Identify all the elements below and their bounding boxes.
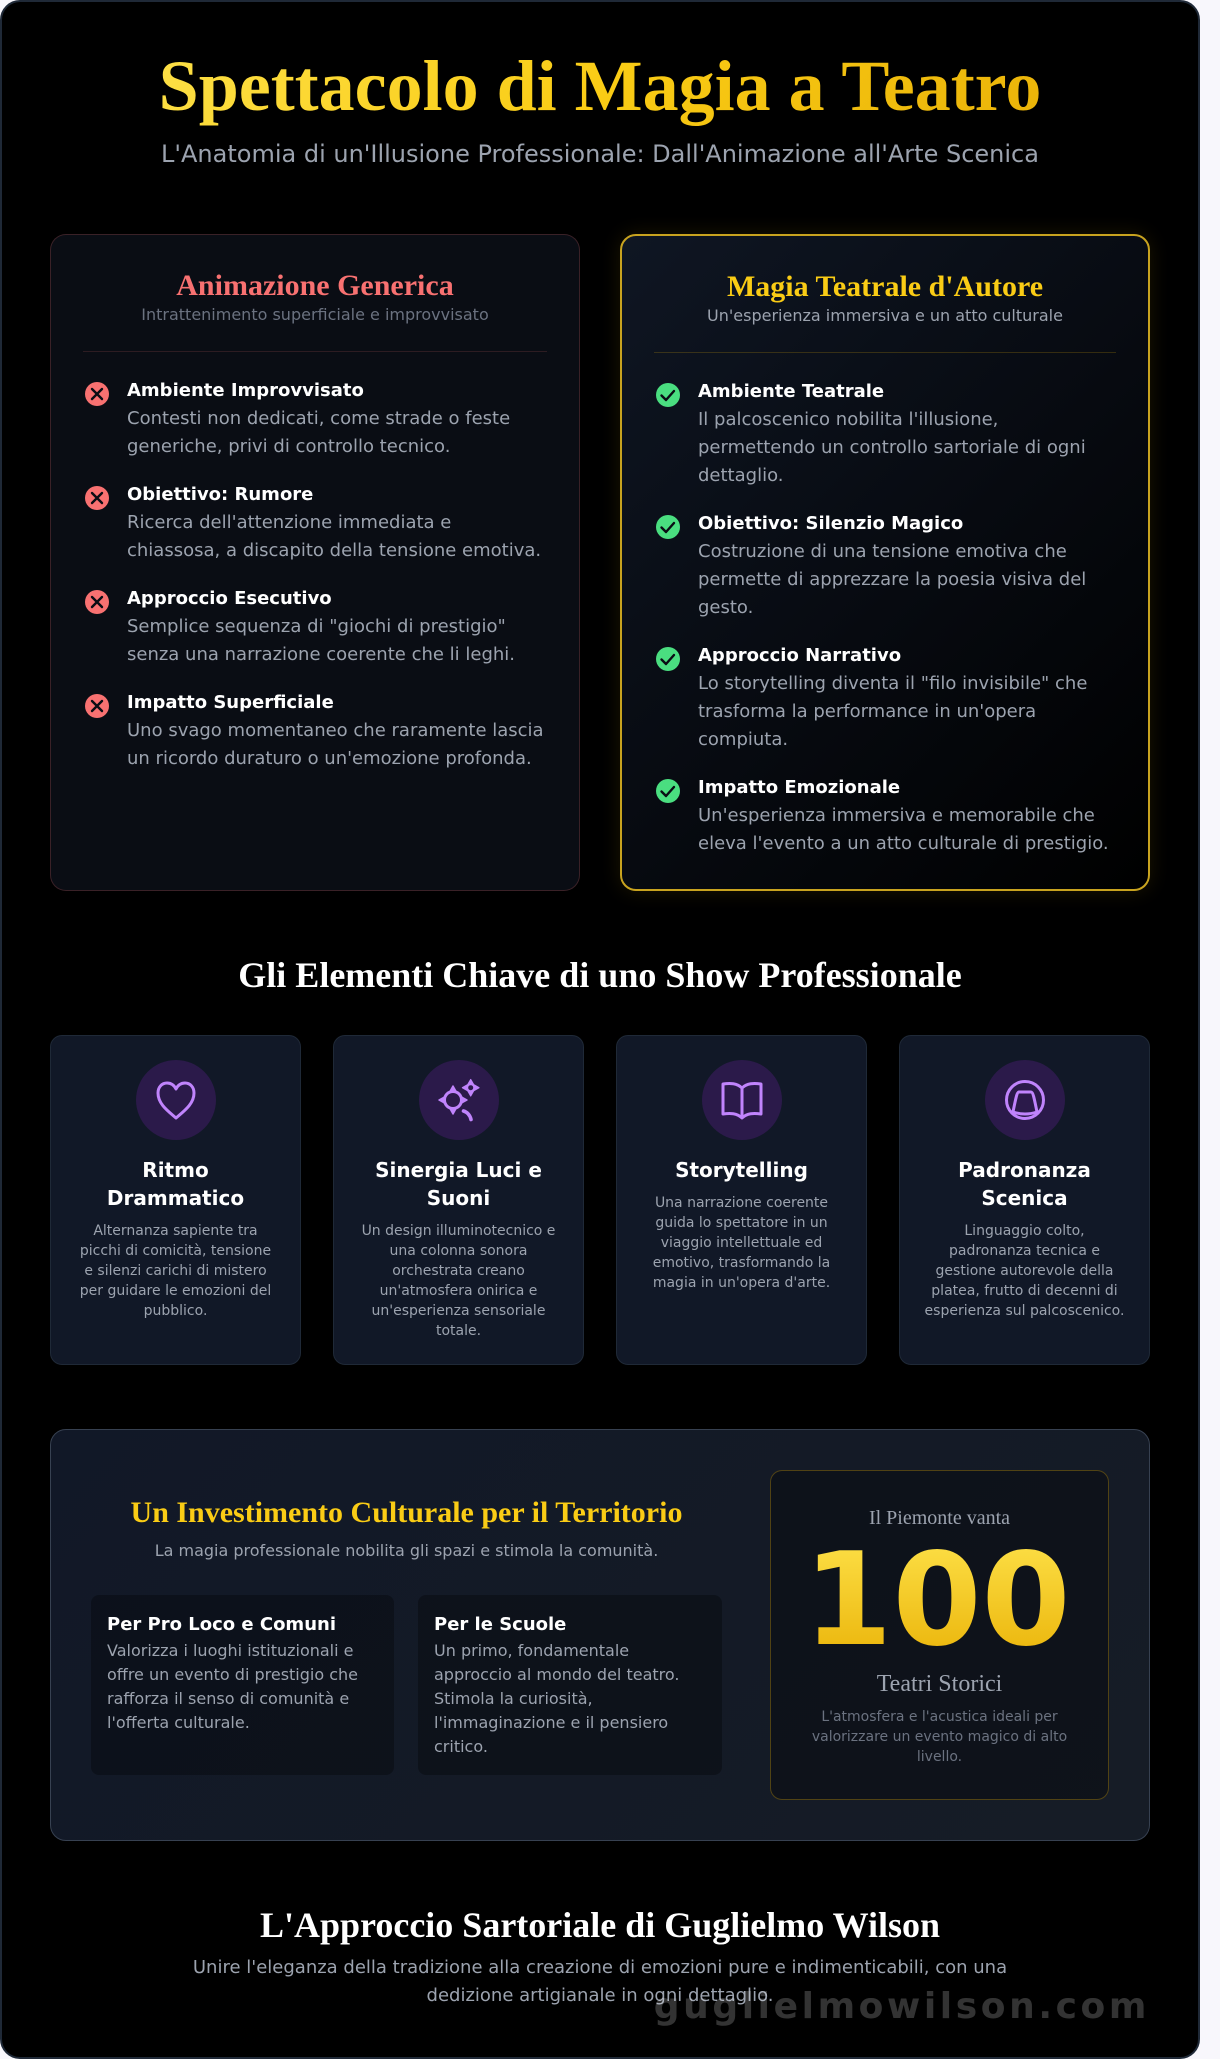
card title: Sinergia Luci e — [375, 1158, 542, 1182]
footer text — [193, 1957, 1007, 2006]
card text: rafforza il senso di comunità e — [107, 1689, 349, 1708]
stat description: L'atmosfera e l'acustica ideali per — [821, 1709, 1058, 1725]
card text: orchestrata creano — [392, 1263, 525, 1279]
card title: Padronanza — [958, 1158, 1091, 1182]
card text: Un primo, fondamentale — [434, 1641, 629, 1660]
card text: l'immaginazione e il pensiero — [434, 1713, 668, 1732]
section heading: Gli Elementi Chiave di uno Show Professionale — [238, 955, 962, 995]
subheading: Un'esperienza immersiva e un atto culturale — [707, 306, 1063, 325]
item: obiettivo silenzio magico: gesto. — [698, 597, 753, 618]
card title — [375, 1158, 542, 1210]
panel: animazione generica — [50, 234, 580, 891]
subtitle: L'Anatomia di un'Illusione Professionale: Dall'Animazione all'Arte Scenica — [161, 140, 1039, 168]
card text: Valorizza i luoghi istituzionali e — [107, 1641, 354, 1660]
stat description — [812, 1709, 1067, 1765]
icon: open book — [702, 1060, 782, 1140]
footer heading: L'Approccio Sartoriale di Guglielmo Wilson — [260, 1905, 940, 1945]
stat intro: Il Piemonte vanta — [869, 1507, 1010, 1529]
card text — [653, 1195, 830, 1291]
item: approccio narrativo: Approccio Narrativo — [698, 645, 901, 666]
item: impatto superficiale — [85, 692, 544, 769]
item: ambiente teatrale: Il palcoscenico nobilita l'illusione, — [698, 409, 998, 430]
title: Spettacolo di Magia a Teatro — [159, 46, 1041, 126]
card title: Storytelling — [675, 1158, 808, 1182]
item: approccio narrativo: trasforma la performance in un'opera — [698, 701, 1036, 722]
item: impatto emozionale — [656, 777, 1109, 854]
card: storytelling — [616, 1035, 867, 1365]
item: impatto superficiale: Impatto Superficiale — [127, 692, 334, 713]
card text: emotivo, trasformando la — [653, 1255, 830, 1271]
card title: Per Pro Loco e Comuni — [107, 1614, 336, 1635]
item: obiettivo silenzio magico: permette di apprezzare la poesia visiva del — [698, 569, 1086, 590]
card text: magia in un'opera d'arte. — [653, 1275, 830, 1291]
card text: esperienza sul palcoscenico. — [925, 1303, 1124, 1319]
watermark: guglielmowilson.com — [654, 1986, 1150, 2027]
stat label: Teatri Storici — [877, 1671, 1002, 1697]
item: ambiente teatrale: dettaglio. — [698, 465, 784, 486]
card: sinergia luci e suoni — [333, 1035, 584, 1365]
card text: picchi di comicità, tensione — [80, 1243, 271, 1259]
subheading: Intrattenimento superficiale e improvvisato — [141, 305, 489, 324]
card text: Una narrazione coerente — [655, 1195, 828, 1211]
card text: un'esperienza sensoriale — [372, 1303, 545, 1319]
item: impatto superficiale: Uno svago momentaneo che raramente lascia — [127, 720, 544, 741]
card text: Un design illuminotecnico e — [362, 1223, 555, 1239]
icon: masque — [985, 1060, 1065, 1140]
item: obiettivo rumore: Ricerca dell'attenzione immediata e — [127, 512, 451, 533]
card text: una colonna sonora — [390, 1243, 527, 1259]
card text: Alternanza sapiente tra — [93, 1223, 258, 1239]
item: ambiente teatrale: Ambiente Teatrale — [698, 381, 884, 402]
stat description: valorizzare un evento magico di alto — [812, 1729, 1067, 1745]
card text: platea, frutto di decenni di — [931, 1283, 1118, 1299]
card text: e silenzi carichi di mistero — [84, 1263, 267, 1279]
item: approccio esecutivo: senza una narrazione coerente che li leghi. — [127, 644, 515, 665]
item: obiettivo silenzio magico — [656, 513, 1086, 618]
card text — [925, 1223, 1124, 1319]
panel: magia teatrale — [620, 234, 1150, 891]
item: approccio esecutivo — [85, 588, 515, 665]
card text: approccio al mondo del teatro. — [434, 1665, 679, 1684]
card text: offre un evento di prestigio che — [107, 1665, 358, 1684]
item: ambiente improvvisato — [85, 380, 510, 457]
item: ambiente teatrale — [656, 381, 1086, 486]
item: ambiente improvvisato: Ambiente Improvvisato — [127, 380, 364, 401]
heading: Animazione Generica — [176, 269, 454, 302]
card text: Linguaggio colto, — [964, 1223, 1085, 1239]
card title: Per le Scuole — [434, 1614, 566, 1635]
item: ambiente teatrale: permettendo un controllo sartoriale di ogni — [698, 437, 1086, 458]
card text: totale. — [436, 1323, 481, 1339]
item: obiettivo silenzio magico: Costruzione di una tensione emotiva che — [698, 541, 1067, 562]
item: impatto emozionale: eleva l'evento a un atto culturale di prestigio. — [698, 833, 1109, 854]
card text — [107, 1641, 358, 1732]
card text — [434, 1641, 679, 1756]
icon: heart — [136, 1060, 216, 1140]
stat description: livello. — [917, 1749, 962, 1765]
card: pro loco — [91, 1595, 394, 1775]
card text: per guidare le emozioni del — [80, 1283, 271, 1299]
card title: Drammatico — [107, 1186, 244, 1210]
item: approccio narrativo: Lo storytelling diventa il "filo invisibile" che — [698, 673, 1087, 694]
card text: Stimola la curiosità, — [434, 1689, 593, 1708]
card text: critico. — [434, 1737, 488, 1756]
item: obiettivo rumore — [85, 484, 541, 561]
heading: Magia Teatrale d'Autore — [727, 270, 1043, 303]
card text: viaggio intellettuale ed — [661, 1235, 822, 1251]
card title: Suoni — [427, 1186, 490, 1210]
card text: l'offerta culturale. — [107, 1713, 250, 1732]
item: impatto emozionale: Impatto Emozionale — [698, 777, 900, 798]
item: impatto emozionale: Un'esperienza immersiva e memorabile che — [698, 805, 1095, 826]
stat number: 100 — [803, 1526, 1071, 1675]
card text — [80, 1223, 271, 1319]
heading: investimento: Un Investimento Culturale per il Territorio — [131, 1496, 682, 1529]
item: obiettivo rumore: chiassosa, a discapito della tensione emotiva. — [127, 540, 541, 561]
item: ambiente improvvisato: generiche, privi di controllo tecnico. — [127, 436, 450, 457]
card text: un'atmosfera onirica e — [380, 1283, 537, 1299]
card: padronanza scenica — [899, 1035, 1150, 1365]
card text: padronanza tecnica e — [949, 1243, 1100, 1259]
card text — [362, 1223, 555, 1339]
item: impatto superficiale: un ricordo duraturo o un'emozione profonda. — [127, 748, 532, 769]
footer text: Unire l'eleganza della tradizione alla creazione di emozioni pure e indimenticabili, con una — [193, 1957, 1007, 1978]
item: obiettivo silenzio magico: Obiettivo: Silenzio Magico — [698, 513, 963, 534]
item: approccio esecutivo: Semplice sequenza di "giochi di prestigio" — [127, 616, 506, 637]
icon: sparkles — [419, 1060, 499, 1140]
item: approccio narrativo: compiuta. — [698, 729, 788, 750]
stat box — [770, 1470, 1109, 1800]
card title — [107, 1158, 244, 1210]
card text: gestione autorevole della — [936, 1263, 1113, 1279]
item: approccio narrativo — [656, 645, 1087, 750]
card text: pubblico. — [144, 1303, 207, 1319]
card title: Scenica — [981, 1186, 1068, 1210]
item: approccio esecutivo: Approccio Esecutivo — [127, 588, 332, 609]
card: scuole — [418, 1595, 722, 1775]
panel: investimento culturale — [50, 1429, 1150, 1841]
item: obiettivo rumore: Obiettivo: Rumore — [127, 484, 313, 505]
card: ritmo drammatico — [50, 1035, 301, 1365]
card title: Ritmo — [142, 1158, 209, 1182]
item: ambiente improvvisato: Contesti non dedicati, come strade o feste — [127, 408, 510, 429]
card text: guida lo spettatore in un — [655, 1215, 828, 1231]
subheading: investimento: La magia professionale nobilita gli spazi e stimola la comunità. — [155, 1541, 658, 1560]
card title — [958, 1158, 1091, 1210]
footer text: dedizione artigianale in ogni dettaglio. — [427, 1985, 773, 2006]
